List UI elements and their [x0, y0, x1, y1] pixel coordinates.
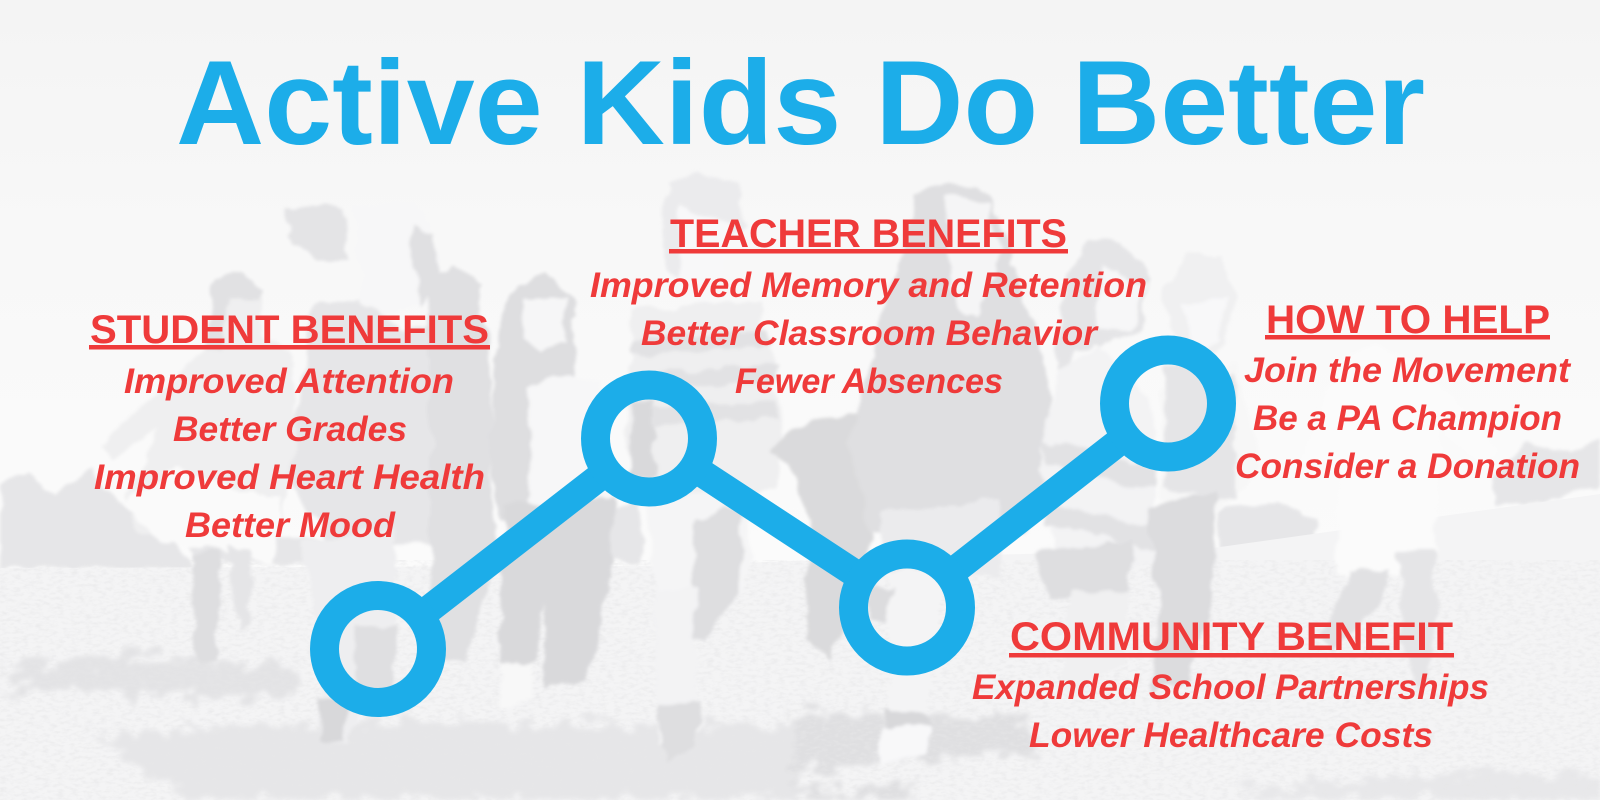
heading: student benefits: STUDENT BENEFITS	[90, 308, 489, 352]
list: student benefits: Improved Attention	[124, 362, 454, 401]
timeline connector with four ring nodes	[324, 350, 1222, 702]
panel: teacher benefits	[590, 212, 1147, 401]
kid far left	[100, 275, 300, 560]
kid dark hair behind	[428, 265, 495, 660]
list: community benefit: Expanded School Partnerships	[972, 668, 1489, 707]
kid curly hair	[285, 205, 348, 262]
grass shadow bands	[0, 655, 1600, 800]
grass texture	[0, 566, 1600, 800]
list: how to help: Join the Movement	[1244, 351, 1571, 390]
list: teacher benefits: Better Classroom Behavior	[641, 314, 1099, 353]
kid with stripes right	[1055, 240, 1150, 380]
list: how to help: Consider a Donation	[1235, 447, 1580, 486]
list: student benefits: Better Grades	[173, 410, 407, 449]
connector: node 1 to node 2	[422, 472, 606, 615]
list: student benefits: Better Mood	[185, 506, 396, 545]
panel: community benefit	[972, 615, 1489, 755]
girl long hair	[490, 275, 590, 520]
connector: node 3 to node 4	[950, 437, 1125, 574]
heading: teacher benefits: TEACHER BENEFITS	[670, 212, 1067, 256]
list: community benefit: Lower Healthcare Costs	[1029, 716, 1433, 755]
big long hair girl	[850, 180, 1055, 530]
list: student benefits	[94, 362, 485, 545]
list: how to help	[1235, 351, 1580, 486]
list: community benefit	[972, 668, 1489, 755]
heading: how to help: HOW TO HELP	[1266, 298, 1550, 342]
background trees	[0, 440, 1600, 568]
ring node: how to help	[1114, 350, 1222, 457]
panel: student benefits	[89, 308, 490, 545]
ring node: student	[324, 596, 432, 702]
list: teacher benefits: Fewer Absences	[735, 362, 1003, 401]
ring node: teacher	[596, 385, 702, 492]
panel: how to help	[1235, 298, 1580, 486]
list: teacher benefits	[590, 266, 1147, 401]
children silhouettes	[100, 173, 1500, 765]
grass field	[0, 494, 1600, 800]
heading: community benefit: COMMUNITY BENEFIT	[1010, 615, 1453, 659]
far right child	[1300, 345, 1500, 575]
ring node: community	[854, 554, 960, 661]
title: Active Kids Do Better	[176, 36, 1425, 170]
list: teacher benefits: Improved Memory and Retention	[590, 266, 1147, 305]
striped boy	[660, 173, 748, 290]
list: how to help: Be a PA Champion	[1253, 399, 1562, 438]
connector: node 2 to node 3	[695, 469, 861, 577]
boy right	[1165, 255, 1235, 360]
list: student benefits: Improved Heart Health	[94, 458, 485, 497]
dark child front	[770, 410, 880, 660]
